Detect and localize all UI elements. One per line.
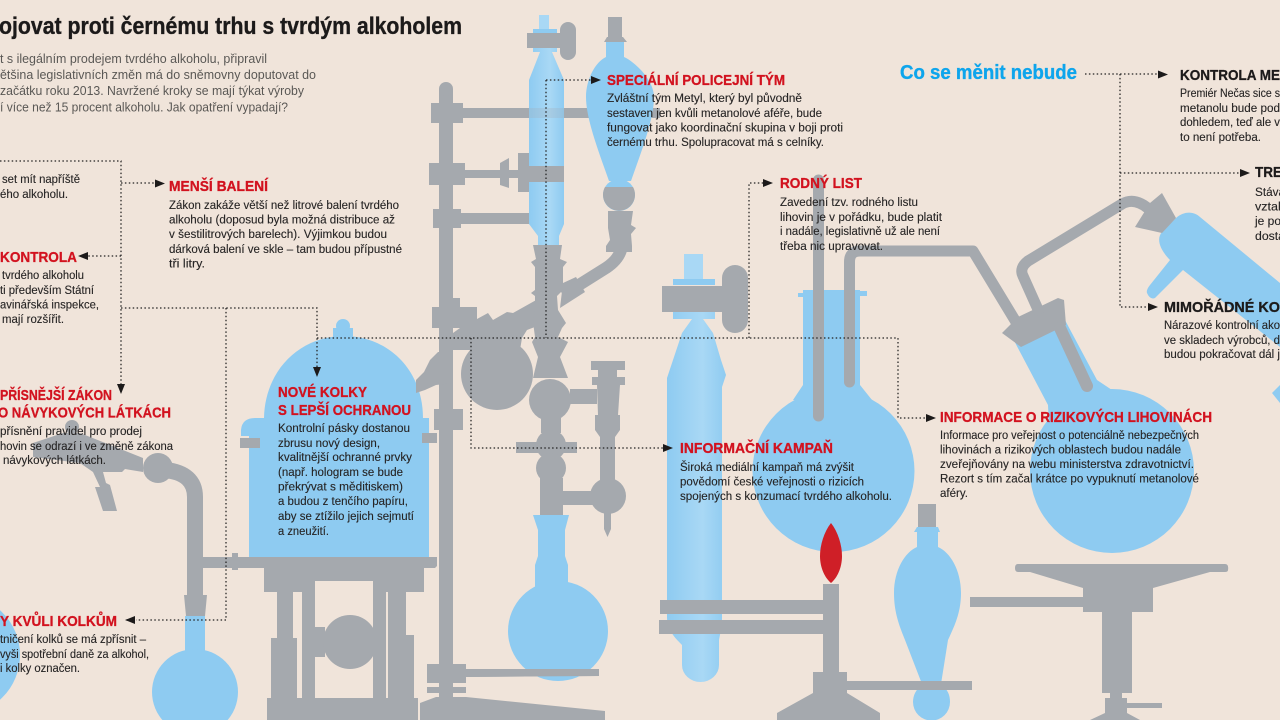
text block: cropped intro item: set mít napříště: [2, 172, 80, 186]
text block: menší balení: MENŠÍ BALENÍ: [169, 177, 269, 195]
text block: rodný list: Zavedení tzv. rodného listu: [780, 195, 918, 209]
text block: kontrola: [0, 250, 99, 326]
text block: informační kampaň: [680, 439, 892, 503]
text block: menší balení: v šestilitrových barelech). Výjimkou budou: [169, 227, 387, 241]
text block: menší balení: Zákon zakáže větší než litrové balení tvrdého: [169, 198, 399, 212]
text block: informační kampaň: Široká mediální kampaň má zvýšit: [680, 459, 855, 474]
arrow: tresty: [1240, 169, 1250, 177]
apparatus: central column and round flask: [466, 245, 626, 681]
text block: kontrola: avinářská inspekce,: [0, 298, 99, 312]
text block: menší balení: tři litry.: [169, 256, 205, 270]
text block: kvůli kolkům: tničení kolků se má zpřísnit –: [0, 632, 146, 646]
text block: přísnější zákon: O NÁVYKOVÝCH LÁTKÁCH: [0, 404, 171, 422]
text block: nové kolky: zbrusu nový design,: [278, 436, 380, 450]
text block: kvůli kolkům: [0, 611, 149, 675]
text block: přísnější zákon: hovin se odrazí i ve změně zákona: [0, 439, 173, 453]
apparatus: condenser column: [527, 15, 576, 246]
text block: kontrola: mají rozšířit.: [2, 312, 64, 326]
apparatus: burner: [777, 584, 880, 720]
text block: speciální policejní tým: černému trhu. Spolupracovat má s celníky.: [607, 135, 824, 149]
arrow: speciální tým: [591, 76, 601, 84]
text block: přísnější zákon: přísnění pravidel pro prodej: [0, 424, 142, 438]
text block: kontrola: tvrdého alkoholu: [2, 268, 84, 282]
text block: nové kolky: [278, 384, 415, 538]
text block: mimořádné kontroly: [1164, 298, 1280, 361]
intro text: ětšina legislativních změn má do sněmovny doputovat do: [0, 67, 316, 82]
text block: informace o rizikových lihovinách: lihovinách a rizikových oblastech budou nadále: [940, 442, 1181, 456]
text block: nové kolky: překrývat s měditiskem): [278, 480, 403, 494]
apparatus: central stand with clamps: [416, 82, 660, 720]
apparatus: dome vessel on stand: [238, 319, 437, 720]
text block: informace o rizikových lihovinách: Informace pro veřejnost o potenciálně nebezpečných: [940, 428, 1199, 442]
text block: nové kolky: a zneužití.: [278, 524, 329, 538]
intro text: [0, 51, 316, 114]
text block: speciální policejní tým: Zvláštní tým Metyl, který byl původně: [607, 91, 802, 105]
text block: kontrola metanolu: to není potřeba.: [1180, 130, 1261, 144]
text block: cropped intro item: [0, 172, 80, 201]
intro text: t s ilegálním prodejem tvrdého alkoholu, připravil: [0, 51, 267, 66]
text block: kvůli kolkům: Y KVŮLI KOLKŮM: [0, 611, 117, 630]
text block: přísnější zákon: návykových látkách.: [3, 453, 106, 467]
text block: nové kolky: a budou z tenčího papíru,: [278, 494, 408, 508]
text block: mimořádné kontroly: MIMOŘÁDNÉ KO: [1164, 298, 1280, 316]
arrow: přísnější zákon: [117, 384, 125, 394]
text block: rodný list: lihovin je v pořádku, bude platit: [780, 210, 943, 224]
apparatus: pear flask: [847, 504, 972, 720]
text block: menší balení: [169, 177, 402, 270]
text block: přísnější zákon: [0, 386, 173, 467]
text block: kvůli kolkům: i kolky označen.: [0, 661, 80, 675]
heading: co se měnit nebude: Co se měnit nebude: [900, 61, 1077, 84]
text block: kontrola: KONTROLA: [0, 250, 77, 266]
text block: nové kolky: S LEPŠÍ OCHRANOU: [278, 401, 411, 419]
text block: přísnější zákon: PŘÍSNĚJŠÍ ZÁKON: [0, 386, 112, 404]
apparatus: separating funnel: [560, 17, 654, 308]
arrow: informace o lihovinách: [926, 414, 936, 422]
text block: informační kampaň: spojených s konzumací tvrdého alkoholu.: [680, 489, 892, 503]
text block: nové kolky: NOVÉ KOLKY: [278, 384, 367, 401]
intro text: í více než 15 procent alkoholu. Jak opatření vypadají?: [0, 100, 288, 114]
title: ojovat proti černému trhu s tvrdým alkoholem: [0, 13, 462, 40]
text block: informace o rizikových lihovinách: aféry.: [940, 486, 968, 500]
icon: burner flame: [820, 523, 842, 583]
text block: speciální policejní tým: fungovat jako koordinační skupina v boji proti: [607, 120, 843, 134]
text block: tresty: [1254, 165, 1280, 243]
text block: speciální policejní tým: sestaven jen kvůli metanolové aféře, bude: [607, 106, 822, 120]
text block: informace o rizikových lihovinách: [940, 408, 1212, 500]
arrow: menší balení: [155, 180, 165, 188]
text block: speciální policejní tým: [607, 71, 843, 149]
text block: informace o rizikových lihovinách: INFORMACE O RIZIKOVÝCH LIHOVINÁCH: [940, 408, 1212, 426]
text block: speciální policejní tým: SPECIÁLNÍ POLICEJNÍ TÝM: [607, 71, 785, 89]
text block: nové kolky: aby se ztížilo jejich sejmutí: [278, 509, 415, 523]
text block: informační kampaň: INFORMAČNÍ KAMPAŇ: [680, 439, 833, 457]
arrow: informační kampaň: [663, 444, 673, 452]
text block: nové kolky: Kontrolní pásky dostanou: [278, 421, 410, 435]
text block: rodný list: třeba nic upravovat.: [780, 239, 883, 253]
text block: nové kolky: kvalitnější ochranné prvky: [278, 450, 413, 464]
apparatus: tall blue tube with burner arms: [659, 254, 825, 682]
text block: nové kolky: (např. hologram se bude: [278, 465, 403, 479]
apparatus: left flask and pipe: [0, 420, 270, 720]
text block: kvůli kolkům: vyši spotřební daně za alkohol,: [0, 647, 149, 661]
dotted connectors: right tree: [1085, 70, 1250, 311]
text block: kontrola metanolu: [1180, 68, 1280, 144]
arrow: kontrola metanolu: [1158, 70, 1168, 78]
arrow: rodný list: [763, 179, 773, 187]
dotted connectors: left tree: [0, 76, 936, 624]
text block: rodný list: i nadále, legislativně už ale není: [780, 224, 941, 238]
text block: cropped intro item: ého alkoholu.: [0, 187, 68, 201]
apparatus: right flask and retort: [1002, 193, 1280, 553]
apparatus: large round flask with tubes: [752, 180, 1016, 552]
arrow: mimořádné kontroly: [1148, 303, 1158, 311]
arrow: nové kolky: [313, 367, 321, 377]
text block: rodný list: [780, 174, 943, 253]
text block: menší balení: dárková balení ve skle – tam budou přípustné: [169, 242, 402, 256]
text block: informace o rizikových lihovinách: zveřejňovány na webu ministerstva zdravotnictví.: [940, 457, 1194, 471]
text block: rodný list: RODNÝ LIST: [780, 174, 862, 192]
text block: kontrola: ti především Státní: [0, 283, 94, 297]
arrow: kontrola: [78, 252, 88, 260]
apparatus: right stand: [970, 564, 1228, 720]
text block: informační kampaň: povědomí české veřejnosti o rizicích: [680, 474, 864, 488]
text block: informace o rizikových lihovinách: Rezort s tím začal krátce po vypuknutí metanolové: [940, 472, 1199, 486]
intro text: začátku roku 2013. Navržené kroky se mají týkat výroby: [0, 83, 304, 98]
text block: menší balení: alkoholu (doposud byla možná distribuce až: [169, 212, 395, 226]
arrow: kvůli kolkům: [125, 616, 135, 624]
